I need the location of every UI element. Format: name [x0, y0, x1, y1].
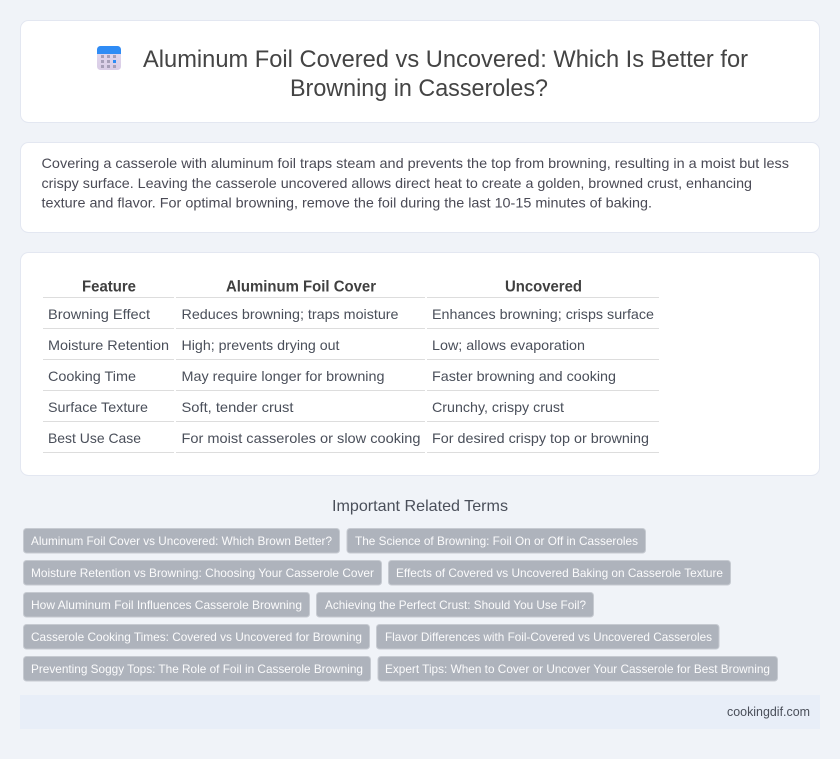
panel: summary paragraph	[20, 142, 820, 232]
icon: calendar	[97, 46, 121, 70]
footer: cookingdif.com	[727, 705, 810, 719]
tag	[24, 560, 382, 585]
table header	[43, 278, 659, 298]
table row: cooking time: Cooking Time	[48, 368, 136, 384]
tag: Moisture Retention vs Browning: Choosing Your Casserole Cover	[31, 566, 374, 580]
table row: surface texture: Soft, tender crust	[182, 399, 294, 415]
tag	[24, 528, 340, 553]
table row: surface texture	[43, 399, 659, 422]
table row: cooking time: May require longer for browning	[182, 368, 384, 384]
tag: How Aluminum Foil Influences Casserole Browning	[31, 598, 302, 612]
tag	[347, 528, 646, 553]
tag: Achieving the Perfect Crust: Should You Use Foil?	[325, 598, 586, 612]
tag: Expert Tips: When to Cover or Uncover Your Casserole for Best Browning	[385, 662, 770, 676]
table row: browning effect	[43, 306, 659, 328]
tag	[388, 560, 730, 585]
text block: summary: texture and flavor. For optimal browning, remove the foil during the last 10-15 minutes of baking.	[42, 194, 652, 210]
tag	[24, 592, 310, 617]
footer	[20, 695, 820, 729]
text block: summary	[42, 155, 789, 210]
table row: moisture retention: Moisture Retention	[48, 337, 169, 353]
tag: Aluminum Foil Cover vs Uncovered: Which Brown Better?	[31, 534, 332, 548]
table row: browning effect: Reduces browning; traps moisture	[182, 306, 399, 322]
table row: cooking time: Faster browning and cooking	[432, 368, 616, 384]
tag: The Science of Browning: Foil On or Off in Casseroles	[355, 534, 638, 548]
table row: surface texture: Crunchy, crispy crust	[432, 399, 564, 415]
text block: summary: Covering a casserole with aluminum foil traps steam and prevents the top from browning, resulting in a moist but less	[42, 155, 789, 171]
table row: cooking time	[43, 368, 659, 390]
tag: Preventing Soggy Tops: The Role of Foil in Casserole Browning	[31, 662, 363, 676]
table row: moisture retention: Low; allows evaporation	[432, 337, 585, 353]
table row: best use case	[43, 430, 659, 452]
tag: Casserole Cooking Times: Covered vs Uncovered for Browning	[31, 630, 362, 644]
table row: best use case: For desired crispy top or browning	[432, 430, 649, 446]
table header: Uncovered	[505, 278, 582, 296]
table row: moisture retention: High; prevents drying out	[182, 337, 340, 353]
table row: best use case: For moist casseroles or slow cooking	[182, 430, 420, 446]
table row: browning effect: Browning Effect	[48, 306, 150, 322]
tag	[316, 592, 594, 617]
table header: Aluminum Foil Cover	[226, 278, 376, 296]
title: Browning in Casseroles?	[290, 75, 548, 102]
title: Aluminum Foil Covered vs Uncovered: Which Is Better for	[143, 46, 748, 73]
tag	[376, 624, 719, 649]
tag list: related terms	[24, 528, 778, 681]
tag: Flavor Differences with Foil-Covered vs Uncovered Casseroles	[385, 630, 712, 644]
table row: browning effect: Enhances browning; crisps surface	[432, 306, 654, 322]
tag: Effects of Covered vs Uncovered Baking on Casserole Texture	[396, 566, 723, 580]
title	[143, 46, 748, 102]
table header: Feature	[82, 278, 136, 296]
tag	[378, 656, 778, 681]
heading: important related terms: Important Related Terms	[332, 498, 508, 515]
table row: best use case: Best Use Case	[48, 430, 141, 446]
panel: comparison table	[20, 252, 820, 476]
tag	[24, 624, 370, 649]
text block: summary: crispy surface. Leaving the casserole uncovered allows direct heat to create a golden, browned crust, enhancing	[42, 175, 752, 191]
table row: moisture retention	[43, 337, 659, 360]
tag	[24, 656, 370, 681]
table row: surface texture: Surface Texture	[48, 399, 148, 415]
panel: title card	[20, 20, 820, 122]
